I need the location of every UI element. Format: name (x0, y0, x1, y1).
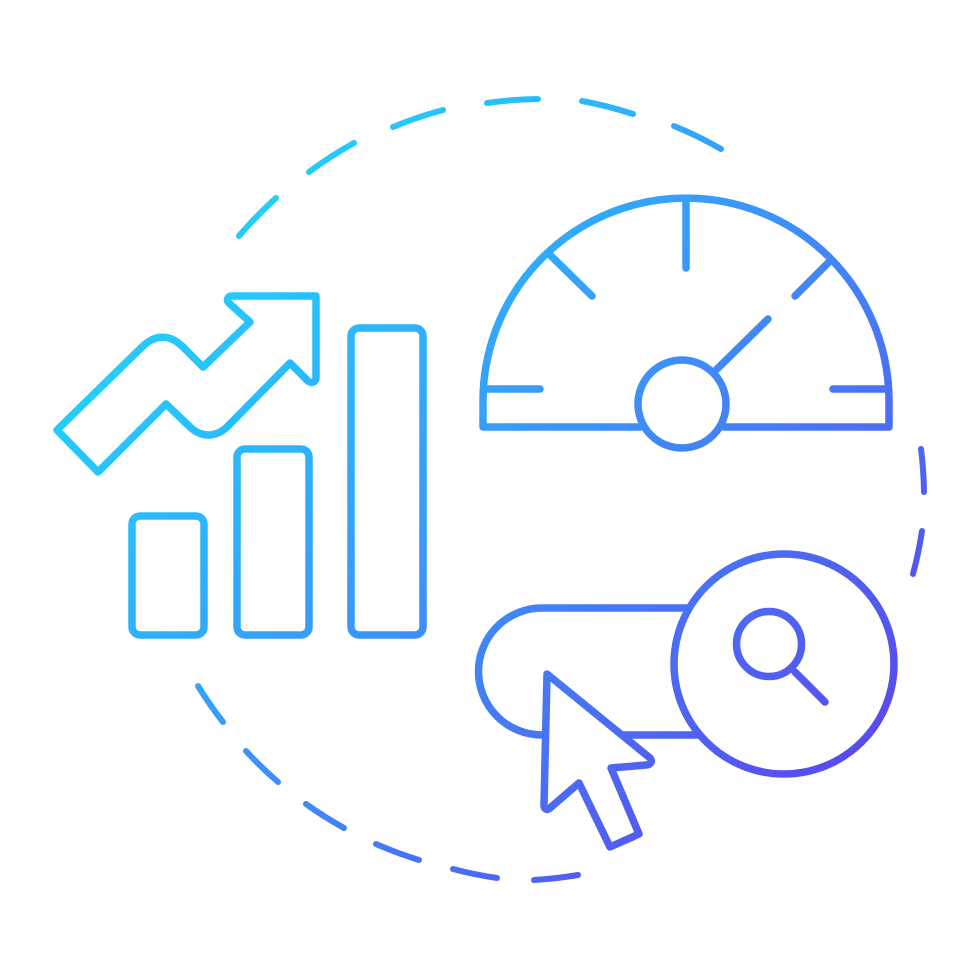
gauge outline (483, 198, 889, 427)
magnifier lens (736, 612, 802, 676)
search pill (478, 608, 698, 735)
dashed circle (198, 99, 924, 880)
magnifier circle (674, 554, 894, 774)
icon: rising arrow (57, 296, 316, 472)
magnifier handle (795, 672, 825, 702)
cursor arrow (544, 674, 651, 847)
gauge hub (638, 360, 726, 448)
icon: speedometer gauge (483, 198, 889, 448)
bar: short (132, 516, 204, 635)
gauge needle (716, 319, 768, 370)
bar chart (132, 328, 423, 635)
icon: search bar with cursor (478, 554, 894, 847)
gauge ticks (485, 200, 887, 389)
bar: tall (351, 328, 423, 635)
bar: medium (237, 449, 309, 635)
